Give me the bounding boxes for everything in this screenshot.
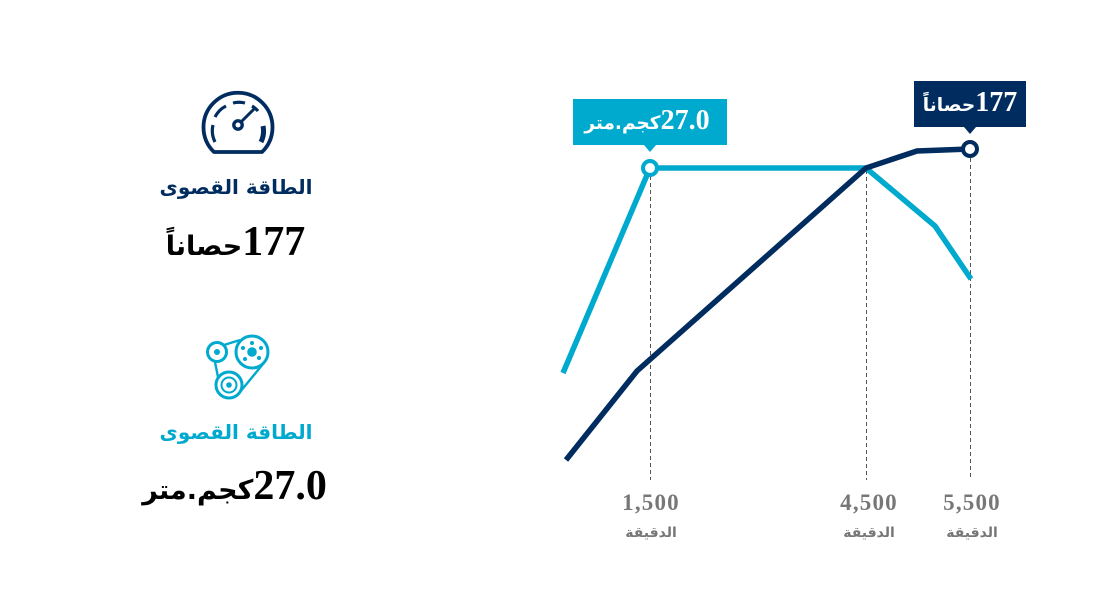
callout pointer: torque	[573, 99, 727, 152]
marker: power peak	[963, 142, 977, 156]
callout pointer: power	[914, 81, 1026, 134]
marker: torque peak	[643, 161, 657, 175]
axis label: 1,500 rpm: 1,500	[622, 490, 680, 515]
heading: maximum power: الطاقة القصوى	[160, 175, 312, 199]
axis label: 4,500 rpm	[840, 490, 898, 541]
callout text: power: 177حصاناً	[923, 87, 1017, 118]
callout text: torque: 27.0كجم.متر	[584, 105, 710, 136]
axis label: 1,500 rpm	[622, 490, 680, 541]
axis label: 5,500 rpm: 5,500	[943, 490, 1001, 515]
value: 177 horsepower: 177حصاناً	[166, 219, 305, 265]
series: power curve	[566, 149, 970, 460]
axis label: 4,500 rpm: 4,500	[840, 490, 898, 515]
axis label: 1,500 rpm: الدقيقة	[625, 525, 677, 541]
axis label: 5,500 rpm	[943, 490, 1001, 541]
series: torque curve	[563, 168, 971, 373]
axis label: 4,500 rpm: الدقيقة	[843, 525, 895, 541]
axis label: 5,500 rpm: الدقيقة	[946, 525, 998, 541]
value: 27.0 kg.m: 27.0كجم.متر	[142, 463, 327, 509]
heading: maximum torque: الطاقة القصوى	[160, 420, 312, 444]
